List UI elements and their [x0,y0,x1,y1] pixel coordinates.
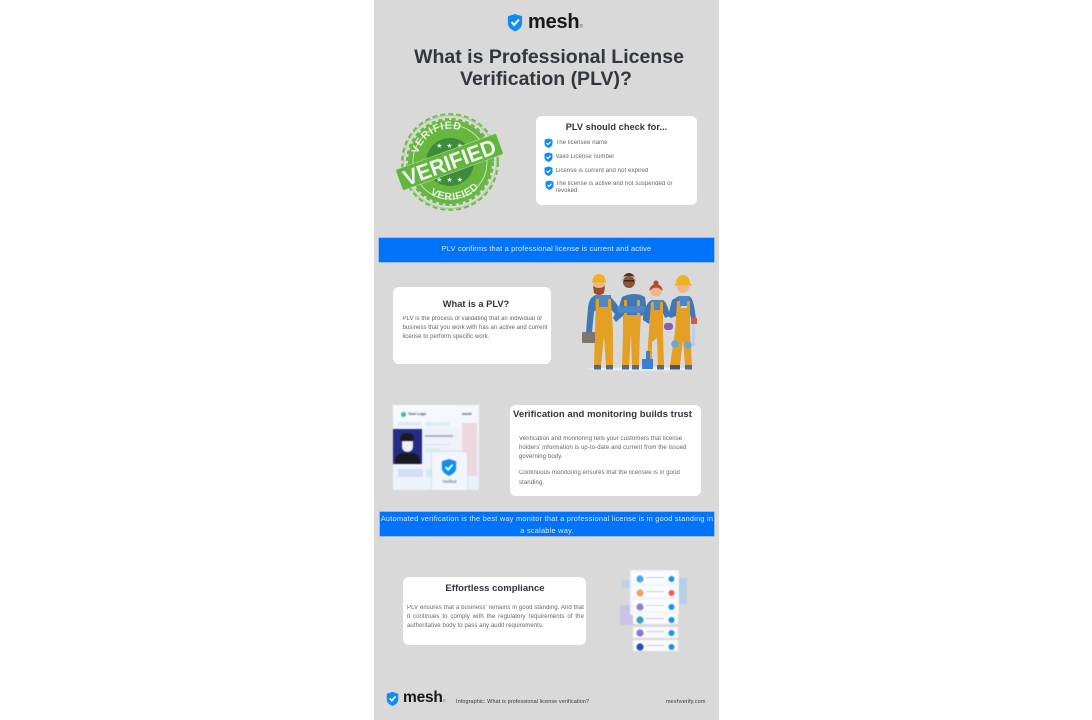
text: compliance: authoritative body to pass any audit requirements. [407,622,544,628]
banner: automated verification [380,512,714,536]
illustration: compliance list [620,570,688,652]
header logos: Your Logo [408,412,426,416]
icon: verified seal: ★ ★ ★ [436,176,464,184]
illustration: verified profile mockup [393,405,479,490]
logo: footer mesh: mesh® [403,689,445,706]
card back [393,427,461,480]
text: verification: holders' information is up-to-date and current from the issued [519,445,686,451]
photo [393,429,422,464]
panel: What is a PLV [392,287,551,364]
text: verification [519,436,686,460]
list item: not expired [544,166,648,176]
text: monitoring: Continuous monitoring ensures that the licensee is in good [519,470,680,476]
text: monitoring [519,470,680,486]
text: verification: Verification and monitoring tells your customers that license [519,436,682,442]
text: definition: license to perform specific work. [402,334,490,340]
icon: verified seal [396,113,504,211]
icon: verified seal: VERIFIED [400,134,500,191]
panel: Effortless compliance [403,577,586,645]
header logos: mesh [462,412,472,416]
panel: Verification and monitoring [510,405,701,496]
footer url: meshverify.com [666,699,706,705]
verified badge card: Verified [443,479,456,484]
illustration: construction workers [582,273,697,370]
list item: active [546,180,673,194]
list item: licensee name: The licensee name [556,140,608,146]
header logos [400,411,472,418]
title: Verification (PLV)? [460,68,632,90]
logo: top mesh: mesh® [528,11,583,33]
list item: license number [544,152,614,162]
text: definition: PLV is the process of validating that an individual or [402,316,542,322]
banner: PLV confirms: PLV confirms that a professional license is current and active [442,244,651,253]
panel: PLV should check for [536,116,697,205]
list item: active: The license is active and not suspended or [556,181,673,187]
verified badge card [432,452,467,490]
banner: automated verification: a scalable way. [520,526,574,534]
heading: what is a PLV: What is a PLV? [443,299,509,309]
list item: not expired: License is current and not expired [556,168,648,174]
list item: licensee name [544,138,608,148]
text: definition [402,316,548,340]
heading: builds trust: Verification and monitoring builds trust [513,409,692,420]
heading: check list: PLV should check for... [566,122,667,132]
title [414,46,684,90]
worker 3 [642,280,673,370]
icon: verified seal: VERIFIED [432,184,478,200]
text: compliance: PLV ensures that a business' remains in good standing. And that [407,604,584,610]
worker 1 [582,274,624,370]
list item: license number: Valid License number [556,154,614,160]
heading: effortless compliance: Effortless compliance [445,582,545,594]
worker 4 [668,275,697,370]
text: compliance [407,604,584,628]
background panel [374,0,719,720]
worker 2 [617,273,647,370]
footer caption: Infographic: What is professional license verification? [456,699,589,705]
icon: verified seal: ★ ★ ★ [436,142,464,150]
text: compliance: it continues to comply with the regulatory requirements of the [407,614,584,620]
list item: active: revoked [556,188,577,194]
banner: automated verification: Automated verification is the best way monitor that a professional license is in good standing in [381,514,713,523]
title: What is Professional License [414,46,684,68]
text: definition: business that you work with has an active and current [402,324,548,330]
text: monitoring: standing. [519,480,544,486]
text: verification: governing body. [519,454,563,460]
icon: verified seal: VERIFIED [411,121,461,152]
banner: PLV confirms [379,238,714,262]
